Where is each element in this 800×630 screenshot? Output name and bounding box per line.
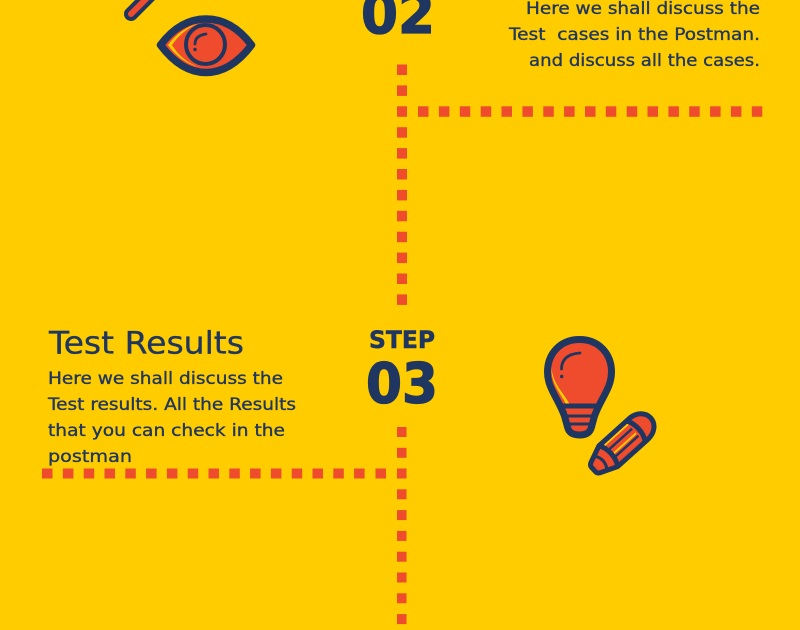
icon: pencil [584, 408, 660, 480]
step 3 label: STEP [369, 326, 435, 354]
step 2 description [508, 0, 760, 71]
icon: pencil fragment [131, 0, 154, 14]
dotted connector: upper vertical [397, 64, 407, 305]
step 3 description: that you can check in the [48, 421, 285, 441]
step 3 heading: Test Results [48, 326, 244, 362]
step 3 description: Test results. All the Results [47, 395, 296, 415]
step 2 description: Test cases in the Postman. [508, 25, 760, 45]
dotted connector: lower horizontal [42, 468, 386, 478]
dotted connector: lower vertical [397, 427, 406, 624]
icon: eye [160, 19, 252, 72]
step 2 description: and discuss all the cases. [529, 51, 760, 71]
step 3 description [47, 369, 296, 467]
icon: light bulb [548, 340, 612, 435]
step 3 number: 03 [366, 352, 438, 416]
step 3 description: Here we shall discuss the [48, 369, 283, 389]
step 3 description: postman [48, 447, 132, 467]
dotted connector: upper horizontal [418, 106, 762, 117]
